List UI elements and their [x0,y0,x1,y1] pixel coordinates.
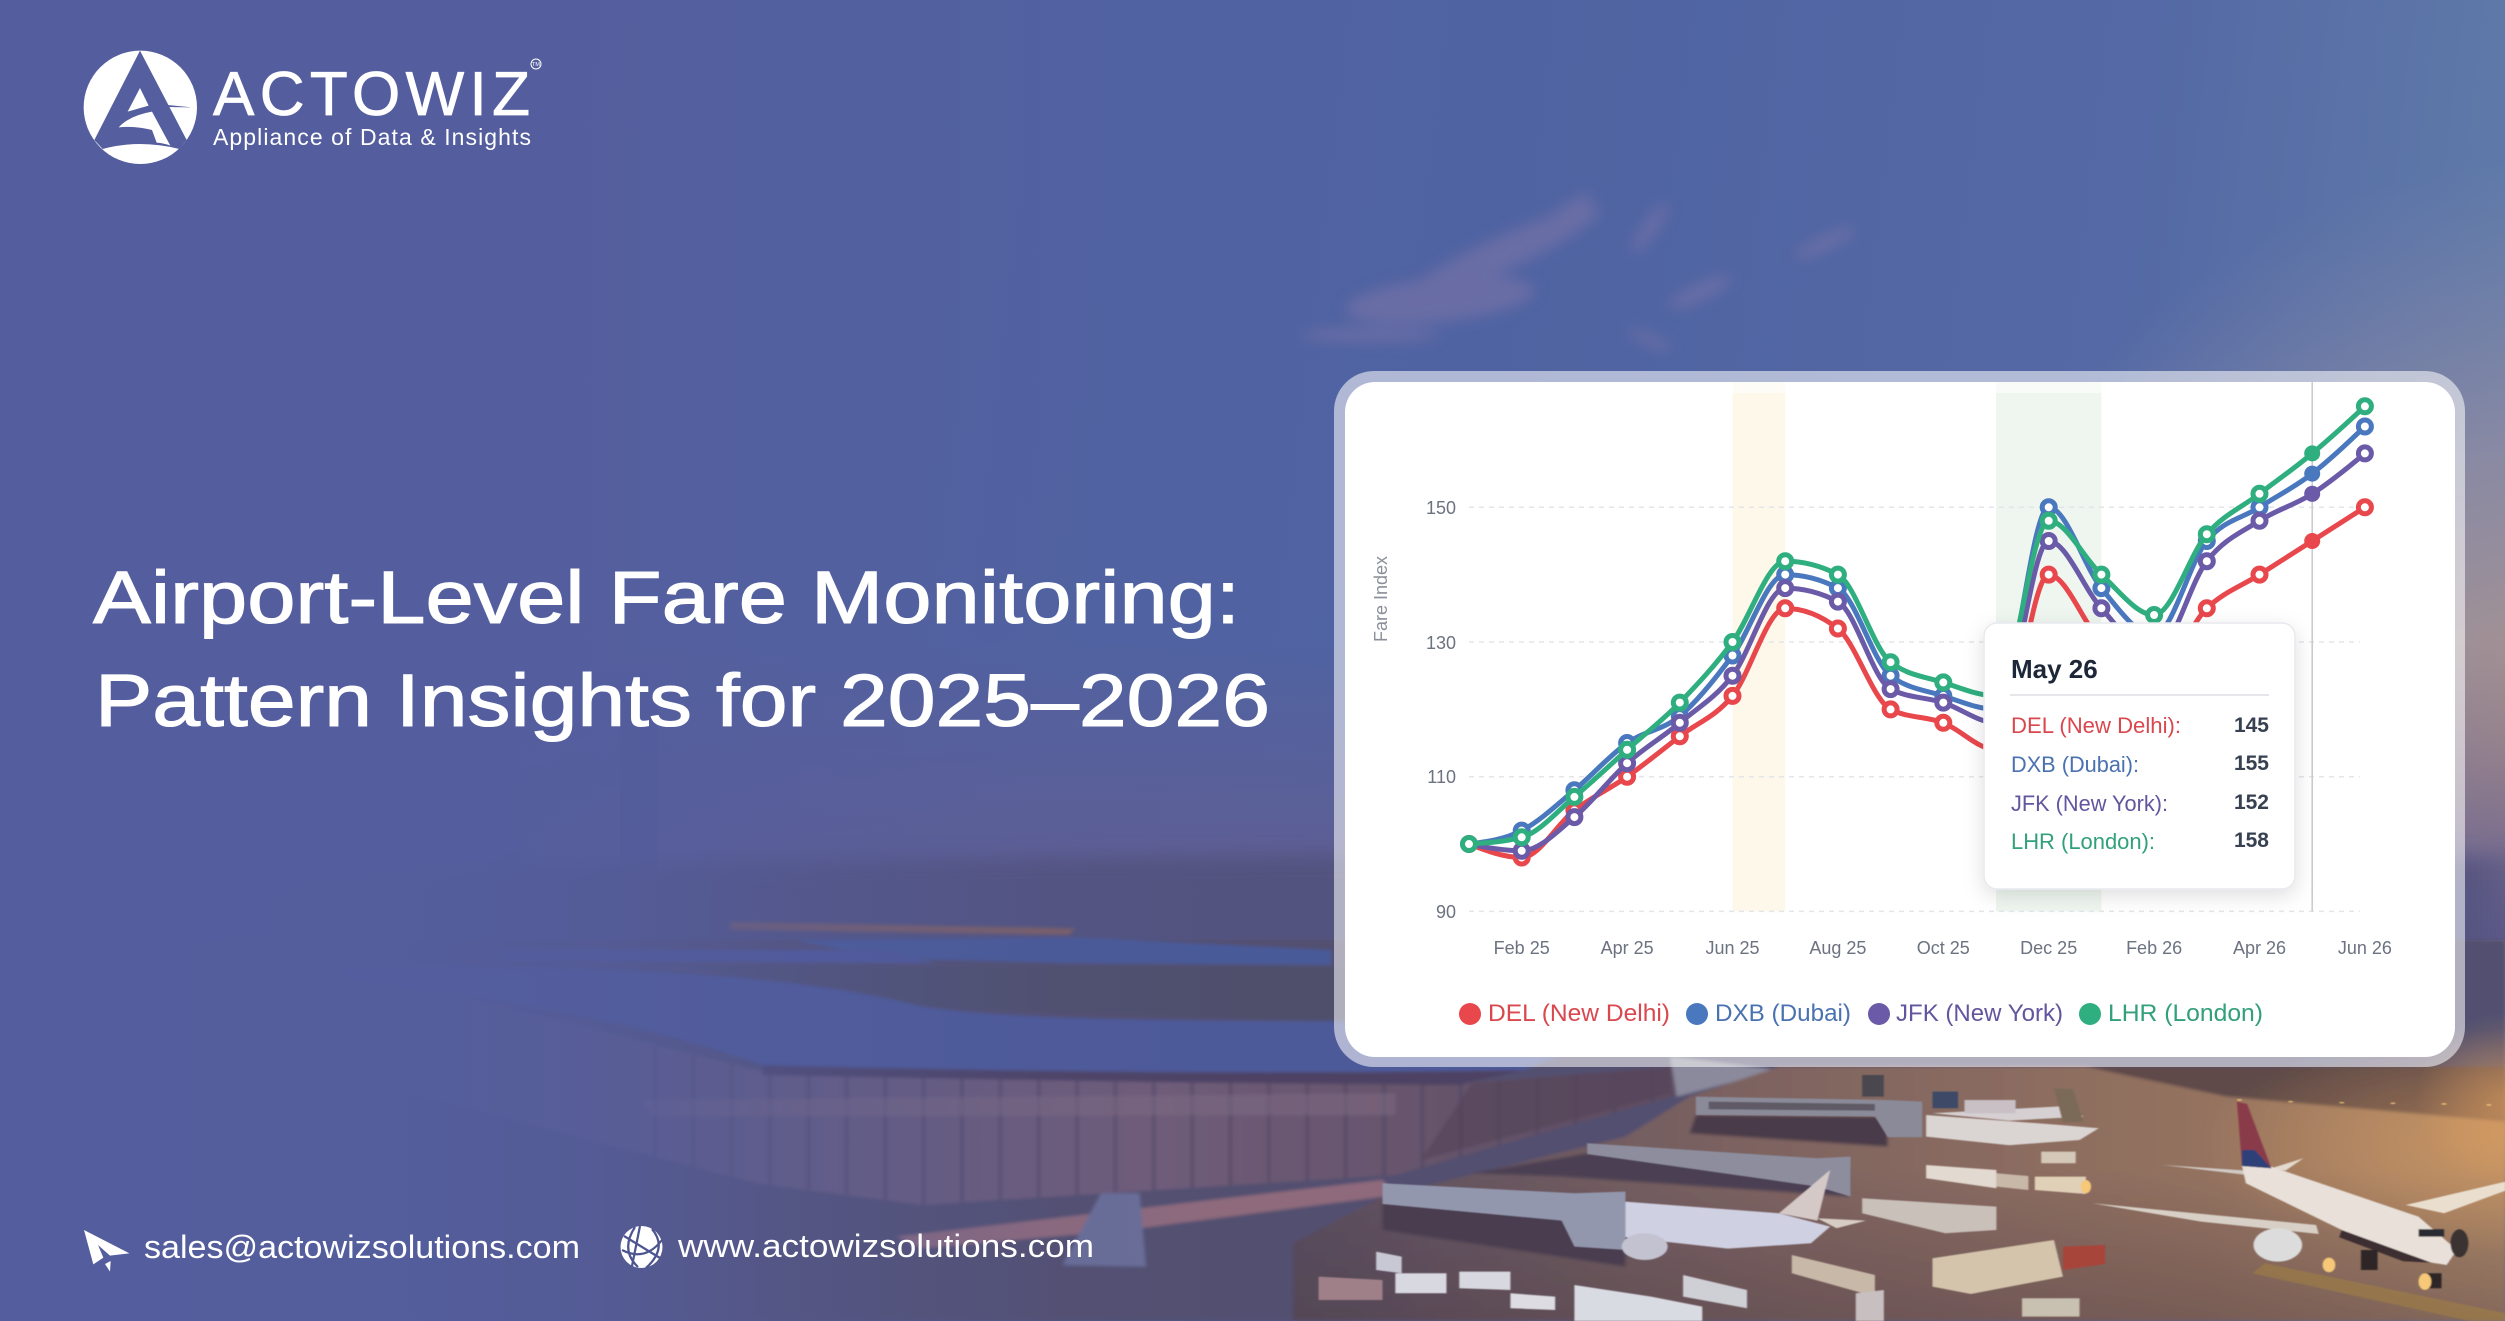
line series: JFK (New York) [1469,447,2371,857]
tooltip: May 26: May 26 [2011,654,2098,684]
line series: DEL (New Delhi) [1462,501,2371,864]
tooltip row: JFK [2011,791,2269,816]
contact: email [84,1229,580,1272]
x axis labels: Apr 25 [1601,938,1654,958]
tooltip row: JFK: JFK (New York): [2011,791,2168,816]
y axis labels: 110 [1427,767,1456,787]
title: Pattern Insights for 2025–2026 [95,659,1270,742]
ground vehicles [1932,1240,2063,1294]
tooltip row: DXB: 155 [2234,752,2269,775]
tooltip row: DEL: DEL (New Delhi): [2011,713,2181,738]
x axis labels: Dec 25 [2020,938,2077,958]
line series: LHR (London) [1462,400,2371,851]
tooltip row: JFK: 152 [2234,791,2269,814]
glass facade [372,973,1683,1205]
y axis labels [1426,498,1456,922]
tooltip: May 26 [1984,623,2295,889]
x axis labels: Jun 25 [1705,938,1760,958]
x axis labels [1494,938,2392,958]
contact: website [620,1226,1094,1268]
legend item: DXB: DXB (Dubai) [1715,1000,1851,1027]
tooltip row: DXB: DXB (Dubai): [2011,752,2139,777]
legend [1459,1000,2263,1027]
line series: DXB (Dubai) [1469,420,2371,844]
highlight band: Nov 25-Jan 26 [1996,382,2101,911]
trademark symbol: TM [532,62,540,68]
terminal, apron, jet bridges and planes [0,922,2505,1321]
runway and glow lights [2081,1099,2491,1290]
tooltip row: DEL [2011,713,2269,738]
y axis labels: 90 [1436,902,1456,922]
x axis labels: Oct 25 [1917,938,1970,958]
roof [347,967,1651,1072]
contact: email: sales@actowizsolutions.com [144,1229,580,1265]
contact: website: www.actowizsolutions.com [677,1228,1094,1264]
jet bridges [1696,1097,1922,1137]
main plane [2092,1203,2319,1234]
middle plane [1626,1202,1830,1249]
legend item: DEL: DEL (New Delhi) [1488,1000,1670,1027]
back planes [1932,1106,2083,1121]
x axis labels: Jun 26 [2338,938,2392,958]
icon: globe [620,1226,662,1268]
tooltip row: LHR: LHR (London): [2011,829,2155,854]
tooltip row: LHR: 158 [2234,829,2269,852]
tooltip row: DXB [2011,752,2269,777]
x axis labels: Feb 25 [1494,938,1550,958]
x axis labels: Apr 26 [2233,938,2286,958]
y axis title: Fare Index [1371,556,1391,642]
x axis labels: Feb 26 [2126,938,2182,958]
distant towers [350,700,658,870]
logo: Actowiz: Appliance of Data & Insights [213,124,531,150]
title [93,556,1270,742]
legend item: LHR: LHR (London) [2108,1000,2263,1027]
icon: logo mark [84,51,197,164]
tooltip row: LHR [2011,829,2269,854]
panel: chart card [1334,371,2465,1067]
clouds [1300,186,1859,355]
legend item: JFK: JFK (New York) [1896,1000,2063,1027]
y axis labels: 130 [1426,633,1456,653]
highlight band: Jun-Jul 25 [1732,382,1785,911]
distant land haze [0,855,2505,1321]
x axis labels: Aug 25 [1809,938,1866,958]
tooltip row: DEL: 145 [2234,714,2269,737]
building under jet bridges [1383,1200,1626,1267]
title: Airport-Level Fare Monitoring: [93,556,1240,639]
icon: paper plane [84,1230,129,1272]
logo: Actowiz [84,51,541,164]
pink walkway strip [896,1180,1395,1248]
grid lines [1469,507,2360,911]
y axis labels: 150 [1426,498,1456,518]
logo: Actowiz: ACTOWIZ [213,60,530,129]
trademark symbol [531,59,541,69]
apron [1293,1067,2505,1321]
hover cursor line: May 26 [2311,382,2313,911]
